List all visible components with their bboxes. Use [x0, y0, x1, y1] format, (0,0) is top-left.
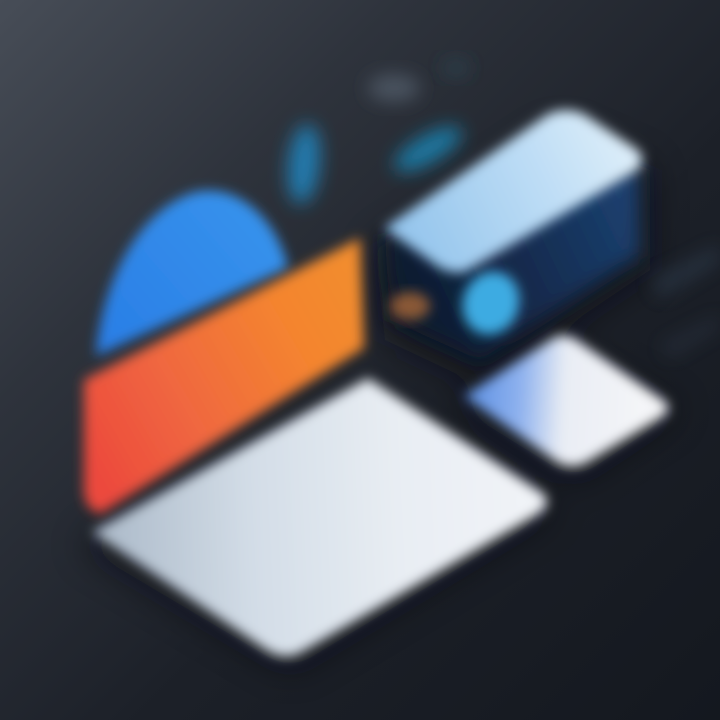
box body	[385, 165, 640, 360]
orange indicator	[390, 292, 430, 320]
icon: blue dome	[96, 190, 288, 356]
motion streaks	[650, 245, 720, 358]
panel: orange screen	[84, 238, 364, 514]
panel: white laptop base	[92, 378, 547, 657]
device: blue projector box	[384, 110, 642, 360]
icon: faint gray dash	[368, 74, 420, 102]
box top	[384, 110, 642, 272]
device: small white card	[464, 335, 668, 466]
cyan lens	[454, 263, 528, 343]
icon: blue dash	[388, 118, 468, 180]
icon: blue droplet	[284, 123, 324, 205]
soft shadows	[80, 130, 680, 670]
icon: faint teal dash	[442, 59, 470, 77]
